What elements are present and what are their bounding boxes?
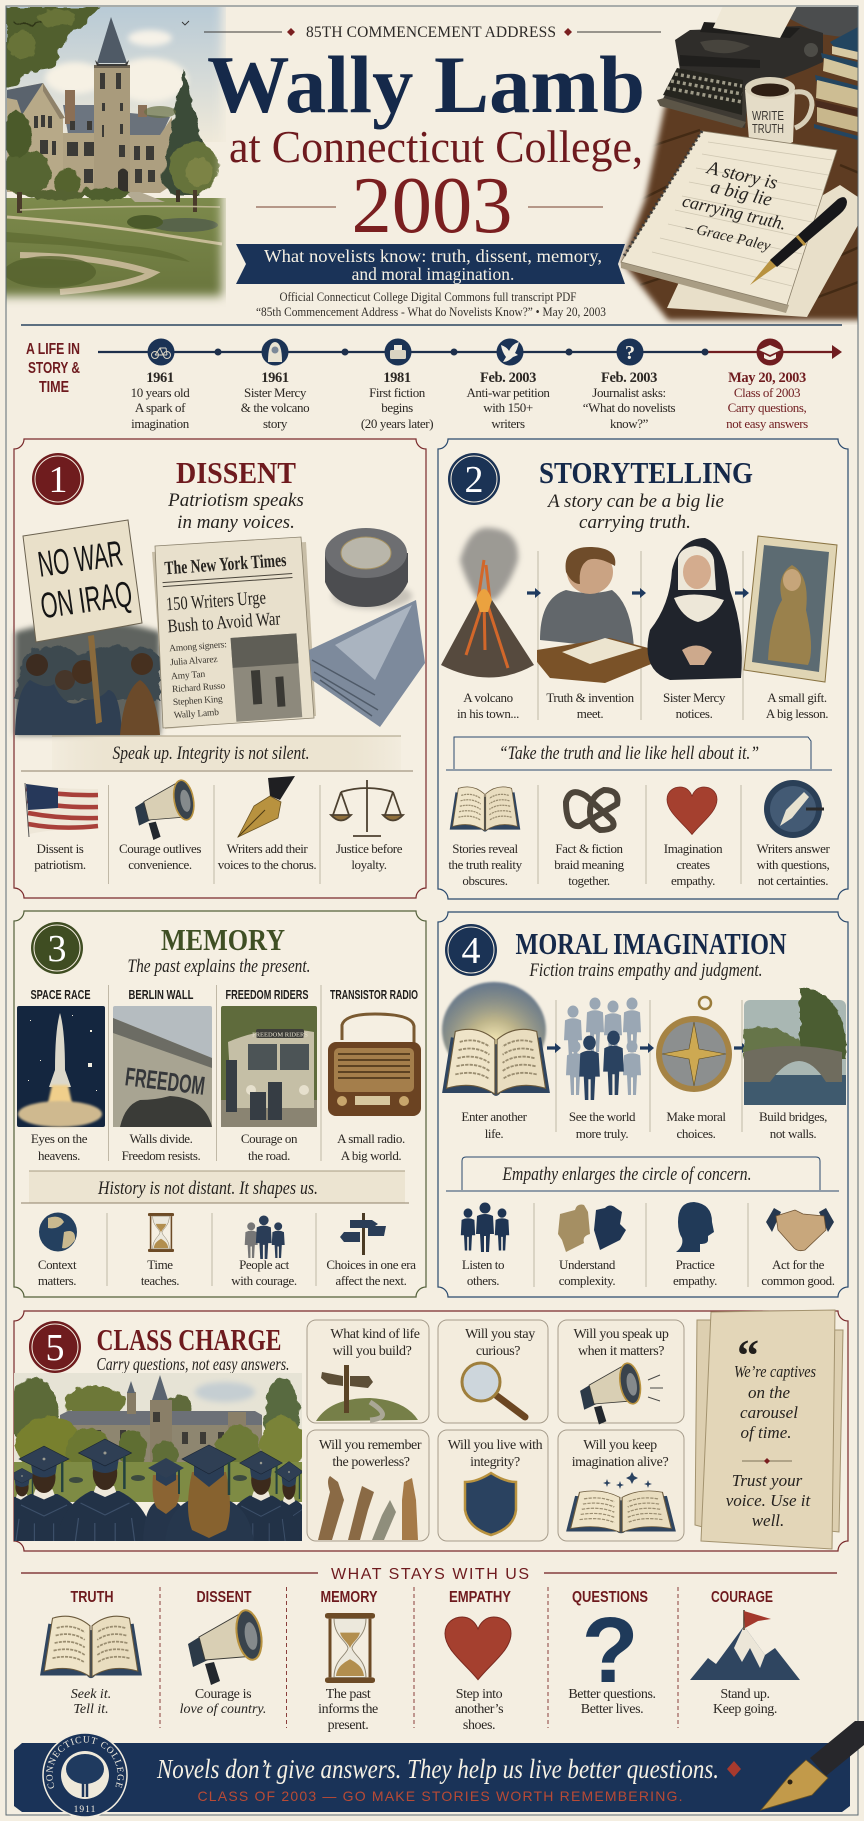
column labels: SPACE RACE — [30, 987, 91, 1002]
timeline event: petition — [466, 370, 550, 431]
illustration: newspaper: The New York Times — [164, 550, 287, 579]
badge 4 — [445, 924, 497, 976]
timeline heading: TIME — [39, 379, 69, 396]
illustration: compass — [656, 997, 732, 1092]
illustration: Freedom Riders bus — [221, 1006, 317, 1127]
takeaway: Questions: ? — [582, 1598, 638, 1702]
takeaway: Truth: Tell it. — [73, 1702, 109, 1717]
takeaway: Questions — [568, 1589, 656, 1717]
card: Will you stay curious — [438, 1320, 548, 1423]
arrow — [632, 588, 646, 598]
timeline event: 1981: begins — [381, 400, 413, 415]
timeline event: journalist: know?” — [610, 416, 649, 431]
timeline heading: A LIFE IN — [26, 341, 80, 358]
note: parchment quote: “ — [737, 1331, 759, 1380]
card: Will you speak up: when it matters? — [578, 1344, 664, 1359]
subtitle ribbon: What novelists know: truth, dissent, memory, — [264, 246, 602, 266]
badge 5: 5 — [46, 1327, 64, 1369]
illustration: boy writing — [537, 547, 656, 683]
timeline node: graduation cap — [756, 338, 784, 366]
card: Will you live with integrity: Will you live with — [448, 1438, 543, 1453]
captions: eras: heavens. — [38, 1148, 80, 1163]
timeline node: bicycle — [148, 338, 174, 366]
fountain pen — [750, 197, 847, 285]
subheading — [546, 491, 724, 533]
captions: Dissent values: voices to the chorus. — [218, 857, 316, 872]
timeline event: 1981: First fiction — [369, 385, 426, 400]
takeaway: Dissent — [180, 1589, 266, 1717]
timeline event: petition: Anti-war petition — [466, 385, 550, 400]
takeaway: Empathy: Step into — [456, 1687, 503, 1702]
captions: eras: Eyes on the — [31, 1131, 88, 1146]
timeline node: nun — [262, 338, 288, 366]
card: Will you remember: the powerless? — [332, 1455, 410, 1470]
captions: history lessons: matters. — [38, 1273, 76, 1288]
captions: empathy actions — [462, 1257, 835, 1288]
subheading: in many voices. — [177, 512, 295, 533]
subtitle ribbon — [236, 244, 625, 284]
captions: story lessons: Writers answer — [757, 841, 831, 856]
badge 3: 3 — [48, 928, 66, 970]
captions: history lessons: Choices in one era — [326, 1257, 416, 1272]
captions: story steps: Sister Mercy — [663, 690, 726, 705]
captions: story lessons: creates — [676, 857, 710, 872]
timeline event: class of 2003 — [726, 370, 808, 431]
timeline event: journalist: Feb. 2003 — [601, 370, 657, 386]
captions: history lessons: Time — [147, 1257, 173, 1272]
takeaway: Truth: Seek it. — [71, 1687, 111, 1702]
badge 1: 1 — [48, 459, 68, 501]
column labels — [30, 987, 418, 1002]
captions: story lessons: together. — [568, 873, 610, 888]
illustration: crowd of silhouettes — [564, 998, 641, 1100]
books stack — [814, 27, 858, 140]
heading: Moral Imagination: MORAL IMAGINATION — [516, 926, 786, 961]
card: Will you speak up: Will you speak up — [574, 1327, 669, 1342]
icon: globe — [39, 1212, 77, 1252]
notepad with handwritten quote: a big lie — [709, 176, 774, 211]
college seal: 1911 — [74, 1805, 96, 1815]
takeaway: Memory: present. — [328, 1718, 368, 1733]
card: Will you live with integrity — [438, 1430, 548, 1541]
captions: empathy steps: life. — [485, 1126, 503, 1141]
college seal — [42, 1734, 128, 1816]
takeaway: Memory: informs the — [318, 1702, 378, 1717]
icon: American flag — [25, 783, 98, 837]
captions: empathy steps: not walls. — [770, 1126, 816, 1141]
captions: empathy actions: others. — [467, 1273, 499, 1288]
timeline event: 1981 — [361, 370, 433, 431]
graduate with long hair, left — [146, 1458, 184, 1541]
captions: history lessons — [38, 1257, 416, 1288]
takeaway: Empathy: another’s — [455, 1702, 503, 1717]
captions: eras — [31, 1131, 405, 1163]
illustration: protest sign — [23, 520, 142, 724]
timeline node: question mark: ? — [625, 342, 635, 364]
timeline event: class of 2003: Class of 2003 — [734, 385, 800, 400]
captions: history lessons: teaches. — [141, 1273, 179, 1288]
icon: fountain pen nib — [238, 776, 295, 837]
timeline event: 1961 spark — [131, 370, 190, 431]
captions: story lessons: Stories reveal — [452, 841, 519, 856]
captions: story steps: A big lesson. — [766, 706, 828, 721]
footer quote: Novels don’t give answers. They help us live better questions. — [156, 1754, 719, 1784]
captions: Dissent values: Writers add their — [227, 841, 308, 856]
captions: eras: A small radio. — [337, 1131, 405, 1146]
captions: empathy actions: Practice — [676, 1257, 715, 1272]
timeline event: petition: with 150+ — [483, 400, 533, 415]
captions: story lessons: with questions, — [757, 857, 830, 872]
timeline event: 1961 spark: 10 years old — [131, 385, 190, 400]
takeaway: Questions: Better lives. — [581, 1702, 643, 1717]
banner: history — [21, 1171, 409, 1203]
card: Will you keep imagination alive: imagination alive? — [572, 1455, 668, 1470]
title: 2003 — [352, 160, 512, 250]
timeline event: journalist: “What do novelists — [583, 400, 676, 415]
captions: story lessons: Fact & fiction — [555, 841, 624, 856]
takeaway: Empathy — [445, 1589, 511, 1733]
captions: eras: Freedom resists. — [122, 1148, 201, 1163]
timeline event: 1961 volcano: Sister Mercy — [244, 385, 307, 400]
notepad with handwritten quote — [621, 131, 858, 317]
illustration: writer's desk with typewriter, mug, books, notepad and pen — [618, 7, 858, 325]
takeaway: Empathy: EMPATHY — [449, 1589, 511, 1606]
banner: empathy — [446, 1157, 839, 1191]
timeline event: 1961 volcano: & the volcano — [241, 400, 309, 415]
captions: empathy steps: See the world — [569, 1109, 636, 1124]
note: parchment quote — [695, 1310, 843, 1549]
banner: Speak up: Speak up. Integrity is not silent. — [112, 744, 310, 764]
graduate with long hair, right — [180, 1444, 254, 1541]
timeline event: petition: writers — [491, 416, 525, 431]
illustration: newspaper: Bush to Avoid War — [167, 608, 282, 637]
captions: history lessons: affect the next. — [336, 1273, 407, 1288]
takeaway: Questions: Better questions. — [568, 1687, 656, 1702]
timeline event: 1961 volcano — [241, 370, 309, 431]
banner: empathy: Empathy enlarges the circle of concern. — [502, 1165, 752, 1185]
badge 2 — [448, 453, 500, 505]
illustration: Berlin wall — [113, 1006, 212, 1127]
card: What kind of life — [307, 1320, 429, 1423]
captions: Dissent values: loyalty. — [351, 857, 387, 872]
timeline event: 1981: 1981 — [383, 370, 411, 386]
captions: empathy actions: Listen to — [462, 1257, 504, 1272]
panel: 4 Moral Imagination — [438, 912, 848, 1297]
captions: story lessons: Imagination — [664, 841, 723, 856]
illustration: newspaper: Julia Alvarez — [170, 655, 218, 668]
timeline event: 1961 volcano: 1961 — [261, 370, 289, 386]
captions: Dissent values: Courage outlives — [119, 841, 201, 856]
takeaway: Dissent: DISSENT — [196, 1589, 252, 1606]
badge 3 — [31, 922, 83, 974]
panel: 5 Class Charge — [0, 1310, 848, 1551]
takeaway: Dissent: love of country. — [180, 1702, 266, 1717]
takeaway: Empathy: shoes. — [463, 1718, 495, 1733]
timeline event: class of 2003: not easy answers — [726, 416, 808, 431]
captions: story steps: meet. — [577, 706, 603, 721]
icon: book — [450, 787, 520, 832]
card: What kind of life: What kind of life — [330, 1327, 420, 1342]
illustration: newspaper: Amy Tan — [171, 670, 206, 682]
illustration: transistor radio — [328, 1014, 421, 1116]
captions: empathy actions: Act for the — [772, 1257, 825, 1272]
captions: Dissent values: Justice before — [336, 841, 403, 856]
panel: 2 Storytelling — [438, 439, 848, 899]
illustration: Freedom Riders bus: FREEDOM RIDERS — [252, 1032, 308, 1038]
card: Will you keep imagination alive — [558, 1430, 684, 1541]
section heading: What stays with us: WHAT STAYS WITH US — [331, 1566, 529, 1583]
icon: puzzle pieces — [558, 1205, 626, 1252]
timeline event: 1961 spark: 1961 — [146, 370, 174, 386]
illustration: framed Madonna picture — [744, 536, 837, 682]
takeaway: Memory — [318, 1589, 378, 1733]
arrow — [547, 1043, 561, 1053]
source note — [256, 289, 606, 319]
timeline event: 1961 spark: A spark of — [135, 400, 186, 415]
captions: Dissent values: Dissent is — [37, 841, 84, 856]
illustration: Sister Mercy — [648, 538, 742, 680]
takeaway: Courage: Stand up. — [720, 1687, 770, 1702]
badge 1 — [32, 453, 84, 505]
captions: eras: Walls divide. — [129, 1131, 193, 1146]
header: eyebrow — [204, 24, 661, 41]
badge 5 — [29, 1321, 81, 1373]
timeline event: 1961 spark: imagination — [131, 416, 190, 431]
note: parchment quote: Trust your — [732, 1471, 803, 1490]
card: Will you stay curious: Will you stay — [465, 1327, 535, 1342]
captions: story steps: notices. — [676, 706, 713, 721]
title: Wally Lamb — [207, 39, 645, 130]
illustration: volcano — [441, 528, 534, 678]
captions: story steps: A small gift. — [767, 690, 827, 705]
captions: story lessons: empathy. — [671, 873, 715, 888]
illustration: newspaper: Richard Russo — [172, 681, 226, 695]
banner: quote — [446, 737, 832, 770]
icon: hourglass — [148, 1213, 174, 1252]
captions: empathy steps: more truly. — [576, 1126, 628, 1141]
typewriter — [657, 6, 823, 128]
captions: empathy steps: Make moral — [666, 1109, 726, 1124]
banner: quote: “Take the truth and lie like hell about it.” — [499, 744, 759, 764]
heading: Dissent: DISSENT — [176, 455, 296, 490]
captions: empathy steps: choices. — [676, 1126, 716, 1141]
takeaway: Memory: MEMORY — [320, 1589, 378, 1606]
fountain pen nib — [761, 1721, 864, 1810]
illustration: glowing open book — [442, 982, 550, 1096]
illustration: newspaper: Wally Lamb — [174, 708, 220, 721]
heading: Storytelling: STORYTELLING — [539, 455, 753, 490]
captions: story steps: Truth & invention — [546, 690, 635, 705]
captions: empathy steps — [461, 1109, 827, 1141]
subheading: Patriotism speaks — [167, 490, 304, 511]
takeaway: Courage — [690, 1589, 800, 1717]
source note: Official Connecticut College Digital Commons full transcript PDF — [280, 289, 576, 304]
captions: story lessons: the truth reality — [448, 857, 523, 872]
badge 4: 4 — [462, 930, 480, 972]
college seal: CONNECTICUT COLLEGE — [46, 1736, 124, 1789]
captions: empathy actions: Understand — [559, 1257, 616, 1272]
takeaway: Memory: The past — [326, 1687, 371, 1702]
heading: Class Charge: CLASS CHARGE — [96, 1322, 282, 1357]
card: Will you keep imagination alive: Will you keep — [583, 1438, 657, 1453]
timeline node: question mark — [616, 338, 644, 366]
illustration: graduates facing campus — [14, 1373, 302, 1541]
captions: eras: Courage on — [241, 1131, 298, 1146]
timeline node: dove — [496, 338, 524, 366]
subheading: Fiction trains empathy and judgment. — [529, 960, 762, 981]
captions: empathy actions: complexity. — [559, 1273, 615, 1288]
captions: history lessons: with courage. — [231, 1273, 297, 1288]
takeaway: Courage: Keep going. — [713, 1702, 777, 1717]
captions: eras: A big world. — [341, 1148, 401, 1163]
timeline heading — [26, 341, 80, 396]
captions: eras: the road. — [248, 1148, 290, 1163]
captions: story steps: in his town... — [457, 706, 519, 721]
captions: empathy steps: Enter another — [461, 1109, 528, 1124]
timeline event: class of 2003: Carry questions, — [728, 400, 807, 415]
subtitle ribbon: and moral imagination. — [352, 264, 514, 284]
column labels: FREEDOM RIDERS — [226, 987, 309, 1002]
column labels: TRANSISTOR RADIO — [330, 987, 418, 1002]
illustration: tarp — [309, 600, 425, 727]
footer call to action: CLASS OF 2003 — GO MAKE STORIES WORTH REMEMBERING. — [198, 1788, 682, 1804]
subheading: carrying truth. — [579, 512, 691, 533]
icon: heart — [667, 787, 717, 834]
timeline event: petition: Feb. 2003 — [480, 370, 536, 386]
icon: profile head — [676, 1202, 714, 1252]
captions: empathy actions: common good. — [761, 1273, 835, 1288]
timeline event: 1981: (20 years later) — [361, 416, 433, 431]
captions: story lessons: braid meaning — [554, 857, 625, 872]
timeline heading: STORY & — [28, 360, 80, 377]
illustration: newspaper: Stephen King — [173, 695, 223, 708]
illustration: newspaper: Among signers: — [169, 640, 227, 654]
captions: Dissent values: patriotism. — [34, 857, 86, 872]
diamond — [727, 1761, 741, 1777]
banner: history: History is not distant. It shapes us. — [97, 1179, 318, 1199]
illustration: newspaper — [152, 537, 316, 729]
icon: braided knot — [566, 790, 617, 830]
arrow — [640, 1043, 654, 1053]
illustration: stone bridge over river — [744, 987, 846, 1105]
arrow — [735, 588, 749, 598]
banner: Speak up — [21, 736, 413, 771]
icon: writer's medallion — [764, 780, 824, 838]
subheading: Carry questions, not easy answers. — [96, 1354, 290, 1374]
card: Will you remember: Will you remember — [319, 1438, 422, 1453]
note: parchment quote: carousel — [740, 1403, 798, 1422]
takeaway: Courage: COURAGE — [711, 1589, 773, 1606]
card: Will you speak up — [558, 1320, 684, 1424]
takeaway: Questions: QUESTIONS — [572, 1589, 648, 1606]
header: eyebrow: 85TH COMMENCEMENT ADDRESS — [306, 24, 556, 41]
captions: history lessons: Context — [38, 1257, 77, 1272]
captions: empathy steps: Build bridges, — [759, 1109, 827, 1124]
card: Will you stay curious: curious? — [476, 1344, 520, 1359]
heading: Memory: MEMORY — [161, 922, 285, 957]
subheading: A story can be a big lie — [546, 491, 724, 512]
illustration: protest sign: NO WAR — [35, 532, 125, 585]
timeline node: typewriter — [384, 338, 412, 366]
icon: people — [245, 1215, 285, 1259]
captions: story lessons: obscures. — [462, 873, 508, 888]
captions: story steps: A volcano — [463, 690, 513, 705]
illustration: campus building and lawn — [1, 7, 226, 308]
footer banner — [14, 1721, 864, 1816]
note: parchment quote: of time. — [740, 1423, 792, 1442]
captions: story lessons: not certainties. — [758, 873, 828, 888]
timeline — [26, 338, 842, 431]
illustration: Berlin wall: FREEDOM — [124, 1061, 207, 1101]
mug: WRITE TRUTH: WRITE — [752, 108, 784, 123]
panel: 1 Dissent — [14, 439, 426, 898]
timeline event: journalist — [583, 370, 676, 431]
note: parchment quote: on the — [748, 1383, 790, 1402]
notepad with handwritten quote: – Grace Paley — [683, 219, 772, 255]
icon: megaphone — [135, 779, 197, 840]
timeline event: 1961 volcano: story — [263, 416, 288, 431]
captions: empathy actions: empathy. — [673, 1273, 717, 1288]
mug: WRITE TRUTH: TRUTH — [752, 121, 784, 136]
icon: signpost — [340, 1213, 386, 1255]
card: Will you remember — [307, 1430, 429, 1541]
subheading — [167, 490, 304, 533]
title: at Connecticut College, — [229, 121, 643, 172]
column labels: BERLIN WALL — [128, 987, 194, 1002]
illustration: space race rocket — [17, 1006, 105, 1127]
captions: Dissent values — [34, 841, 403, 872]
panel: 3 Memory — [14, 911, 426, 1297]
icon: handshake — [766, 1208, 834, 1251]
captions: story lessons — [448, 841, 831, 888]
illustration: protest sign: ON IRAQ — [38, 573, 135, 626]
card: Will you live with integrity: integrity? — [470, 1455, 520, 1470]
note: parchment quote: well. — [752, 1511, 784, 1530]
captions: story steps — [457, 690, 828, 721]
source note: “85th Commencement Address - What do Novelists Know?” • May 20, 2003 — [256, 304, 606, 319]
notepad with handwritten quote: carrying truth. — [680, 190, 788, 234]
subheading: The past explains the present. — [128, 956, 310, 977]
icon: scales of justice — [331, 780, 403, 836]
notepad with handwritten quote: A story is — [703, 157, 779, 194]
illustration: newspaper: 150 Writers Urge — [165, 587, 267, 615]
icon: listening people — [461, 1202, 509, 1252]
takeaway: Dissent: Courage is — [195, 1687, 251, 1702]
captions: Dissent values: convenience. — [128, 857, 192, 872]
timeline event: journalist: Journalist asks: — [592, 385, 666, 400]
timeline event: class of 2003: May 20, 2003 — [728, 370, 806, 386]
takeaway: Truth: TRUTH — [70, 1589, 114, 1606]
badge 2: 2 — [464, 459, 484, 501]
illustration: crowd — [15, 621, 160, 735]
illustration: duct tape — [325, 528, 412, 609]
card: What kind of life: will you build? — [333, 1344, 412, 1359]
takeaway: Truth — [40, 1589, 142, 1717]
note: parchment quote: voice. Use it — [726, 1491, 812, 1510]
arrow — [734, 1043, 748, 1053]
captions: history lessons: People act — [239, 1257, 290, 1272]
title — [207, 39, 645, 250]
arrow — [527, 588, 541, 598]
note: parchment quote: We’re captives — [734, 1362, 816, 1381]
mug: WRITE TRUTH — [745, 77, 812, 147]
